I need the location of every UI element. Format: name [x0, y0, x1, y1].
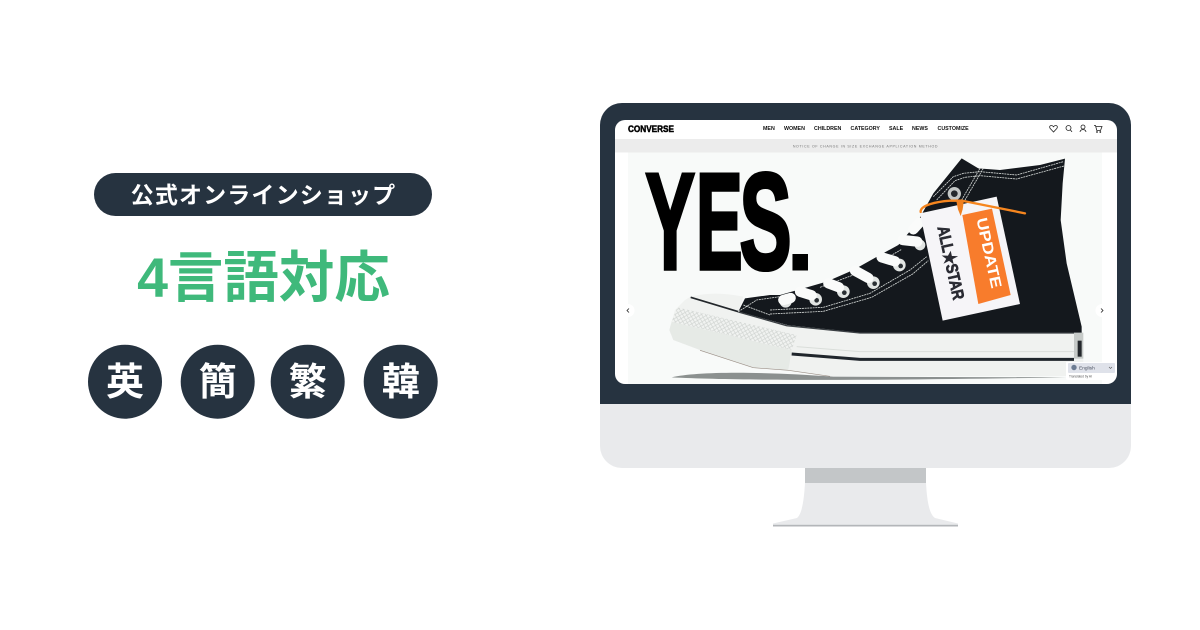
navigation menu — [763, 126, 969, 132]
stitching — [738, 162, 1064, 315]
navigation menu: WOMEN — [784, 126, 805, 132]
icon: Korean — [364, 345, 438, 419]
tag label: ALL STAR: ALL★STAR — [933, 224, 968, 301]
navigation menu: MEN — [763, 126, 775, 132]
sole stripes — [691, 297, 738, 312]
icon: Korean: 韓 — [382, 362, 420, 404]
navigation menu: NEWS — [912, 126, 928, 132]
badge: official online shop — [94, 173, 432, 216]
header icons — [1050, 125, 1102, 132]
hang tag — [920, 197, 1020, 321]
headline: YES.: S — [740, 145, 792, 298]
language circles — [88, 345, 438, 419]
icon: Simplified Chinese: 簡 — [199, 362, 237, 404]
navigation menu: CHILDREN — [814, 126, 842, 132]
panel: language message — [88, 173, 438, 419]
icon: Simplified Chinese — [181, 345, 255, 419]
monitor stand — [773, 468, 958, 526]
site header — [628, 124, 1102, 135]
icon: Traditional Chinese: 繁 — [289, 362, 327, 404]
carousel previous button — [622, 304, 634, 317]
language selector widget: Translated by AI — [1069, 374, 1092, 378]
illustration: desktop monitor — [600, 103, 1131, 526]
navigation menu: CATEGORY — [850, 126, 880, 132]
headline: YES.: E — [696, 146, 743, 299]
sneaker photo illustration — [669, 158, 1084, 380]
website screen — [615, 120, 1117, 384]
notice bar: NOTICE OF CHANGE IN SIZE EXCHANGE APPLICATION METHOD — [793, 144, 938, 148]
badge: official online shop: 公式オンラインショップ — [131, 182, 396, 208]
navigation menu: CUSTOMIZE — [938, 126, 969, 132]
orange strap — [921, 201, 1025, 213]
heel label — [1074, 333, 1083, 359]
laces — [780, 223, 925, 308]
headline: YES.: . — [785, 172, 816, 295]
sole — [669, 294, 1084, 376]
carousel next button — [1096, 304, 1108, 317]
toe bumper — [669, 307, 797, 370]
monitor body — [600, 404, 1131, 468]
notice bar — [615, 139, 1117, 152]
icon: English: 英 — [106, 362, 144, 404]
headline: YES.: Y — [646, 146, 695, 299]
ground shadow — [672, 373, 1067, 380]
language selector widget — [1066, 362, 1117, 380]
icon: English — [88, 345, 162, 419]
icon: Traditional Chinese — [271, 345, 345, 419]
language selector widget: English — [1079, 366, 1095, 372]
tag label: UPDATE: UPDATE — [972, 216, 1004, 290]
hero banner — [622, 145, 1108, 384]
heading: 4 languages supported: 4言語対応 — [137, 247, 390, 309]
navigation menu: SALE — [889, 126, 904, 132]
top eyelet — [948, 187, 961, 200]
headline: YES. — [646, 145, 816, 299]
logo: Converse: CONVERSE — [628, 124, 674, 135]
canvas upper — [738, 158, 1082, 334]
